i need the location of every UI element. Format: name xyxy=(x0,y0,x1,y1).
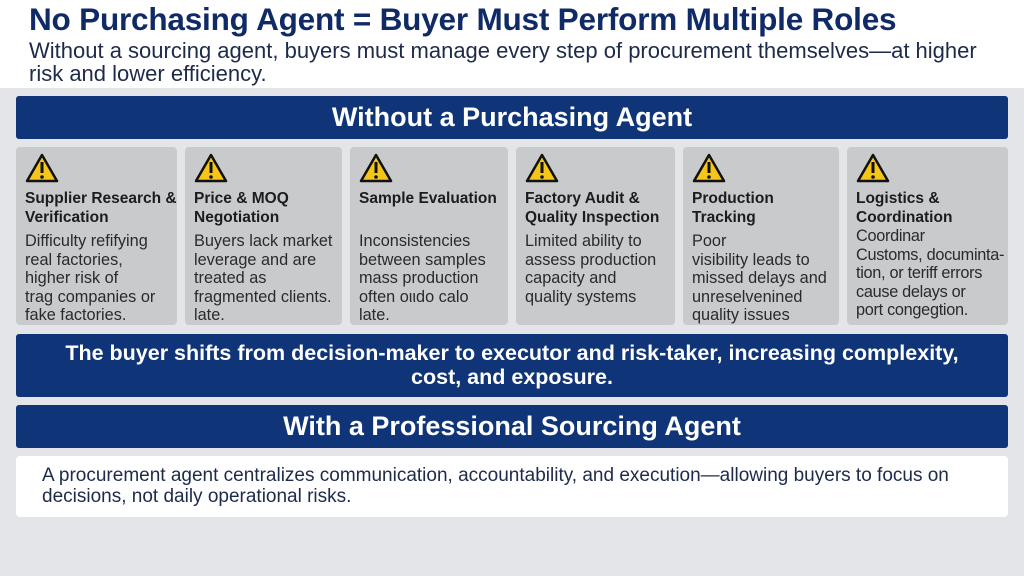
card: supplier research: fake factories. xyxy=(25,306,126,324)
subtitle: risk and lower efficiency. xyxy=(29,61,267,86)
card: production tracking xyxy=(683,147,839,325)
summary bar: cost, and exposure. xyxy=(411,365,613,389)
icon: warning xyxy=(26,154,58,182)
summary bar: The buyer shifts from decision-maker to executor and risk-taker, increasing complexity, xyxy=(65,341,959,365)
card: production tracking: Poor xyxy=(692,232,726,250)
icon: warning xyxy=(856,154,890,182)
card: factory audit: assess production xyxy=(525,250,656,268)
card: price & moq: treated as xyxy=(194,269,266,287)
header: without agent xyxy=(16,96,1008,139)
icon: warning xyxy=(526,154,558,182)
card: supplier research: Supplier Research & xyxy=(25,190,177,207)
card: logistics xyxy=(847,147,1008,325)
summary bar xyxy=(16,334,1008,397)
header: with agent xyxy=(16,405,1008,448)
card: factory audit: Quality Inspection xyxy=(525,209,659,226)
icon: warning xyxy=(692,154,726,182)
card: production tracking: missed delays and xyxy=(692,269,827,287)
subtitle: Without a sourcing agent, buyers must manage every step of procurement themselves—at higher xyxy=(29,38,977,63)
card: sample evaluation: often oιιdo calo xyxy=(359,288,469,306)
card: production tracking: Tracking xyxy=(692,209,756,226)
card: production tracking: visibility leads to xyxy=(692,250,810,268)
card: logistics: tion, or teriff errors xyxy=(856,264,982,282)
card: price & moq: fragmented clients. xyxy=(194,288,332,306)
card: supplier research: higher risk of xyxy=(25,269,118,287)
card: supplier research: real factories, xyxy=(25,250,123,268)
icon: warning xyxy=(194,154,228,182)
card: price & moq: leverage and are xyxy=(194,250,316,268)
card: supplier research xyxy=(16,147,177,325)
title: No Purchasing Agent = Buyer Must Perform Multiple Roles xyxy=(29,1,896,37)
card: logistics: Coordination xyxy=(856,209,952,226)
text block: agent benefits xyxy=(16,456,1008,517)
card: sample evaluation: Sample Evaluation xyxy=(359,190,497,207)
text block: agent benefits: decisions, not daily operational risks. xyxy=(42,486,351,507)
card: logistics: Coordinar xyxy=(856,227,925,245)
text block: agent benefits: A procurement agent centralizes communication, accountability, and execution—allowing buyers to focus on xyxy=(42,465,949,486)
card: sample evaluation: Inconsistencies xyxy=(359,232,470,250)
card: supplier research: trag companies or xyxy=(25,288,155,306)
card: price & moq: late. xyxy=(194,306,225,324)
card: price & moq: Price & MOQ xyxy=(194,190,289,207)
card: supplier research: Verification xyxy=(25,209,109,226)
card: logistics: Customs, documinta- xyxy=(856,246,1004,264)
card: sample evaluation: between samples xyxy=(359,250,486,268)
card: logistics: port congegtion. xyxy=(856,301,968,319)
header: without agent: Without a Purchasing Agent xyxy=(332,102,692,132)
header: with agent: With a Professional Sourcing Agent xyxy=(283,411,741,441)
card: logistics: cause delays or xyxy=(856,282,966,300)
card: supplier research: Difficulty refifying xyxy=(25,232,148,250)
card: price & moq: Negotiation xyxy=(194,209,279,226)
card: price & moq xyxy=(185,147,342,325)
card: price & moq: Buyers lack market xyxy=(194,232,332,250)
card: factory audit: quality systems xyxy=(525,288,636,306)
card: production tracking: quality issues xyxy=(692,306,790,324)
card: sample evaluation: mass production xyxy=(359,269,478,287)
card: sample evaluation xyxy=(350,147,508,325)
card: logistics: Logistics & xyxy=(856,190,940,207)
card: production tracking: Production xyxy=(692,190,774,207)
card: production tracking: unreselvenined xyxy=(692,288,802,306)
card: factory audit: Limited ability to xyxy=(525,232,642,250)
card: factory audit xyxy=(516,147,675,325)
subtitle xyxy=(29,38,977,86)
card: factory audit: capacity and xyxy=(525,269,616,287)
icon: warning xyxy=(360,154,392,182)
card: factory audit: Factory Audit & xyxy=(525,190,640,207)
card: sample evaluation: late. xyxy=(359,306,390,324)
